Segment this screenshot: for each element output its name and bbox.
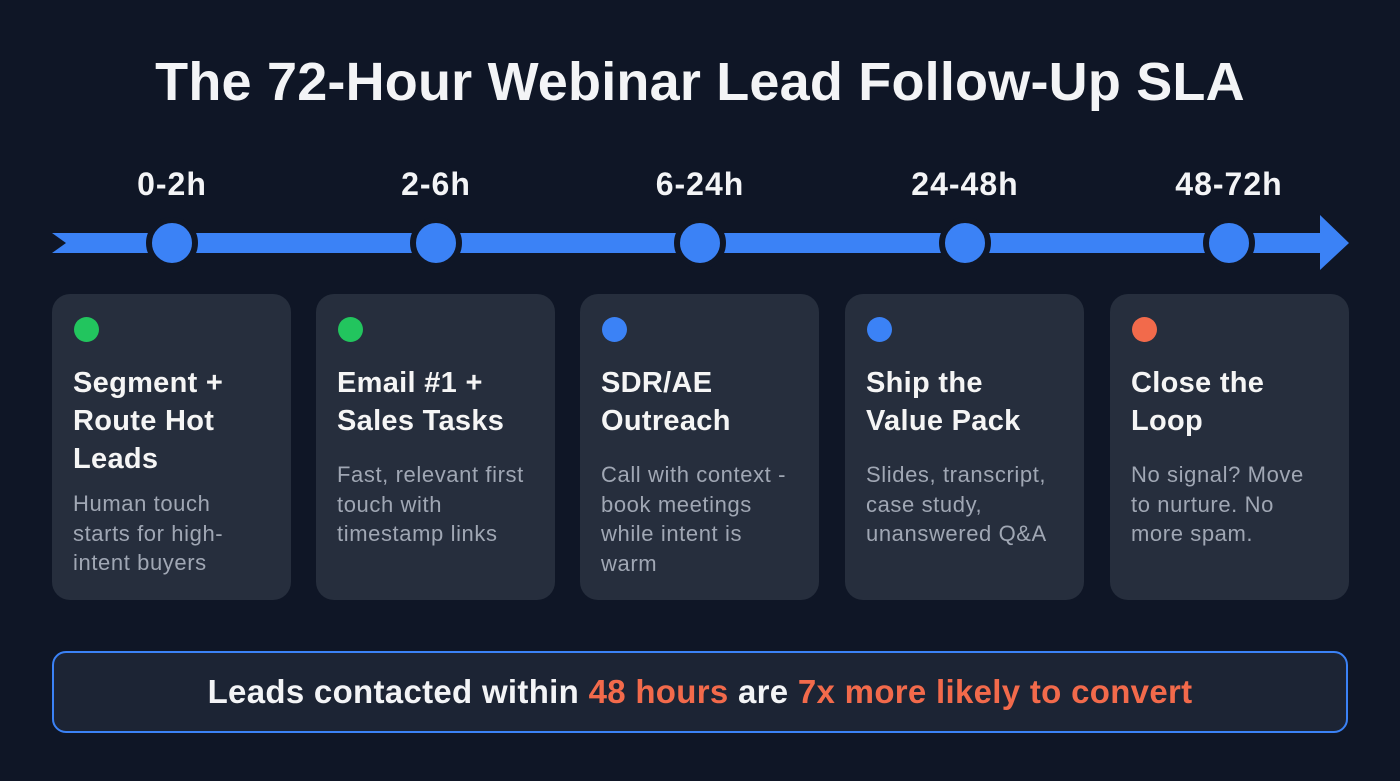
description: No signal? Move (1131, 462, 1304, 487)
card title (601, 367, 731, 437)
card title (1131, 367, 1264, 437)
card 1 (52, 294, 291, 600)
dot (74, 317, 99, 342)
description: while intent is (601, 521, 742, 546)
card title: Close the (1131, 367, 1264, 399)
description: starts for high- (73, 520, 223, 546)
description: case study, (866, 492, 982, 516)
title: The 72-Hour Webinar Lead Follow-Up SLA (155, 52, 1245, 112)
card title: Loop (1131, 405, 1203, 437)
card title: Email #1 + (337, 367, 483, 399)
description: timestamp links (337, 521, 498, 546)
time label 6-24h: 6-24h (656, 166, 744, 202)
card 4 (845, 294, 1084, 600)
card title: Value Pack (866, 405, 1021, 437)
description: touch with (337, 492, 442, 516)
description: Slides, transcript, (866, 462, 1046, 487)
dot (867, 317, 892, 342)
card 3 (580, 294, 819, 600)
callout (52, 651, 1348, 733)
card title: SDR/AE (601, 367, 712, 399)
dot (338, 317, 363, 342)
time label 48-72h: 48-72h (1175, 166, 1283, 202)
card title: Outreach (601, 405, 731, 437)
card 5 (1110, 294, 1349, 600)
description: book meetings (601, 492, 752, 516)
description: unanswered Q&A (866, 521, 1047, 546)
description: intent buyers (73, 550, 207, 575)
card title (337, 367, 504, 437)
dot (602, 317, 627, 342)
description: warm (601, 550, 657, 576)
card title (866, 367, 1021, 437)
dot (1132, 317, 1157, 342)
card title: Segment + (73, 367, 223, 399)
description: Fast, relevant first (337, 462, 524, 487)
card 2 (316, 294, 555, 600)
description (601, 462, 786, 576)
description: Call with context - (601, 462, 786, 487)
timeline arrow (52, 215, 1349, 270)
card title (73, 367, 223, 475)
card title: Ship the (866, 367, 983, 399)
description (337, 462, 524, 546)
callout: Leads contacted within 48 hours are 7x more likely to convert (208, 673, 1192, 710)
description (1131, 462, 1304, 546)
time label 24-48h: 24-48h (911, 166, 1019, 202)
description: Human touch (73, 491, 210, 516)
card title: Sales Tasks (337, 405, 504, 437)
description: to nurture. No (1131, 492, 1274, 516)
card title: Route Hot (73, 405, 214, 437)
time label 2-6h: 2-6h (401, 166, 471, 202)
card title: Leads (73, 443, 158, 475)
time label 0-2h: 0-2h (137, 166, 207, 202)
description: more spam. (1131, 521, 1253, 546)
description (866, 462, 1047, 546)
description (73, 491, 223, 575)
